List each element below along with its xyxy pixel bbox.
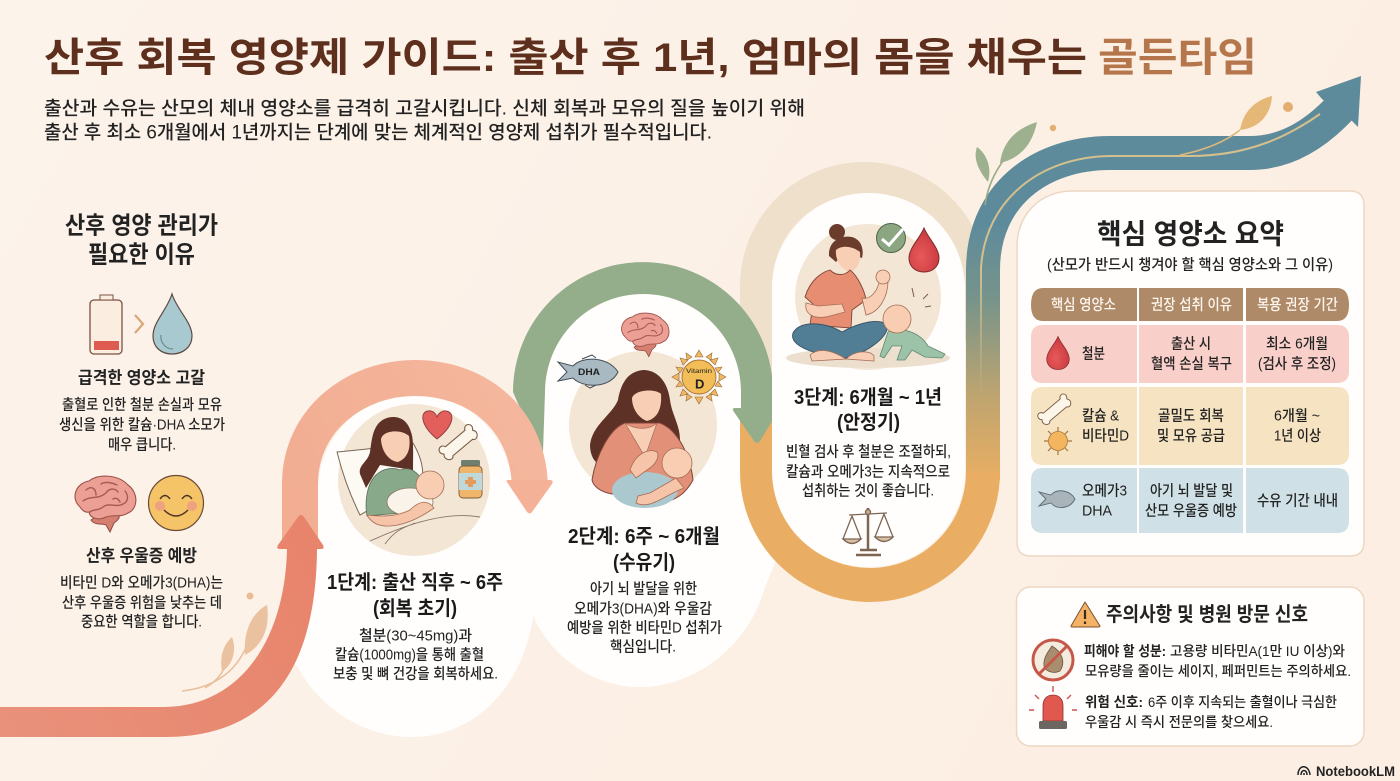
text block: stage 1 xyxy=(333,628,498,682)
text block: stage 3: 섭취하는 것이 좋습니다. xyxy=(802,482,934,500)
icon: smile xyxy=(148,476,204,530)
text block: stage 2: 예방을 위한 비타민D 섭취가 xyxy=(567,620,722,636)
heading: stage 1 xyxy=(327,571,503,620)
text block: danger signs: 우울감 시 즉시 전문의를 찾으세요. xyxy=(1085,714,1273,730)
heading: stage 2: 2단계: 6주 ~ 6개월 xyxy=(568,525,720,548)
text block: stage 2: 오메가3(DHA)와 우울감 xyxy=(574,600,712,618)
subtitle xyxy=(44,98,805,144)
arrow: green stage 2 ribbon xyxy=(513,262,773,452)
table header: 핵심 영양소 xyxy=(1051,296,1116,314)
subtitle: 출산과 수유는 산모의 체내 영양소를 급격히 고갈시킵니다. 신체 회복과 모유의 질을 높이기 위해 xyxy=(44,98,805,120)
heading: why xyxy=(65,212,218,268)
text block: nutrient depletion: 매우 큽니다. xyxy=(108,436,176,454)
title: 골든타임 xyxy=(1098,36,1257,80)
icon: green check xyxy=(876,224,906,252)
text block: nutrient depletion: 생신을 위한 칼슘·DHA 소모가 xyxy=(59,416,225,434)
heading: nutrient depletion: 급격한 영양소 고갈 xyxy=(78,368,205,388)
text block: stage 1: 칼슘(1000mg)을 통해 출혈 xyxy=(335,646,484,664)
panel: stage 3 xyxy=(786,224,951,555)
decoration: green leaves xyxy=(976,122,1037,205)
table row: iron: 철분 xyxy=(1082,346,1105,362)
arrow: orange U-shaped ribbon xyxy=(757,415,983,585)
text block: depression prevention xyxy=(60,574,223,630)
heading: stage 2: (수유기) xyxy=(613,551,675,574)
icon: brain xyxy=(75,476,136,532)
icon: water drop xyxy=(153,294,192,354)
text block: depression prevention: 중요한 역할을 합니다. xyxy=(81,614,202,630)
table header: 복용 권장 기간 xyxy=(1257,296,1338,314)
text block: nutrient depletion: 출혈로 인한 철분 손실과 모유 xyxy=(62,396,222,414)
illustration: mother resting with newborn xyxy=(337,404,490,556)
heading: stage 1: 1단계: 출산 직후 ~ 6주 xyxy=(327,571,503,594)
text block: nutrient depletion xyxy=(59,396,225,454)
table row: iron: (검사 후 조정) xyxy=(1258,356,1336,372)
icon: low battery xyxy=(90,295,122,354)
subtitle: 출산 후 최소 6개월에서 1년까지는 단계에 맞는 체계적인 영양제 섭취가 필수적입니다. xyxy=(44,122,712,144)
text block: stage 3: 칼슘과 오메가3는 지속적으로 xyxy=(786,464,950,480)
text block: card subtitle: (산모가 반드시 챙겨야 할 핵심 영양소와 그 이유) xyxy=(1047,256,1333,274)
heading: stage 3 xyxy=(794,386,942,434)
text block: danger signs: 6주 이후 지속되는 출혈이나 극심한 xyxy=(1148,694,1337,710)
table row: omega-3 DHA: 아기 뇌 발달 및 xyxy=(1150,482,1233,500)
table row: omega-3 DHA: 수유 기간 내내 xyxy=(1257,492,1338,510)
table row: calcium and vitamin D: 골밀도 회복 xyxy=(1158,408,1224,424)
icon: prohibited herb xyxy=(1033,640,1073,680)
text block: depression prevention: 비타민 D와 오메가3(DHA)는 xyxy=(60,574,223,592)
heading: stage 3: (안정기) xyxy=(837,411,900,434)
text block: danger signs xyxy=(1085,694,1337,730)
panel: cautions and warning signs xyxy=(1016,587,1364,746)
title: 산후 회복 영양제 가이드: 출산 후 1년, 엄마의 몸을 채우는 xyxy=(44,36,1087,80)
table row: omega-3 DHA: 오메가3 xyxy=(1082,482,1127,500)
illustration: mother with crawling baby xyxy=(786,224,950,370)
arrow: peach stage 1 ribbon xyxy=(300,378,553,540)
table row: calcium and vitamin D: 비타민D xyxy=(1082,428,1129,444)
text block: stage 1: 철분(30~45mg)과 xyxy=(359,628,472,644)
text block: depression prevention: 산후 우울증 위험을 낮추는 데 xyxy=(62,594,222,612)
decoration: orange leaf and dots xyxy=(1050,96,1293,155)
arrow: salmon rising ribbon xyxy=(0,515,324,737)
icon: vitamin D sun xyxy=(672,350,726,404)
heading: depression prevention: 산후 우울증 예방 xyxy=(86,546,197,566)
icon: red blood drop xyxy=(909,228,939,272)
arrow: green arrowhead xyxy=(733,408,778,443)
icon: DHA fish: DHA xyxy=(578,367,601,377)
heading: why: 필요한 이유 xyxy=(88,242,195,268)
panel: why nutrition management is needed xyxy=(59,212,225,630)
panel: stage 3 white capsule xyxy=(772,193,965,567)
icon: chevron xyxy=(135,315,143,333)
table header xyxy=(1031,288,1349,321)
panel: key nutrients summary xyxy=(1017,191,1364,556)
table row: calcium and vitamin D: 6개월 ~ xyxy=(1274,408,1320,424)
text block: stage 2: 아기 뇌 발달을 위한 xyxy=(590,580,697,598)
icon: balance scale xyxy=(843,508,893,555)
panel: stage 1 xyxy=(327,404,503,682)
table row: omega-3 DHA: 산모 우울증 예방 xyxy=(1145,502,1237,520)
text block: avoid ingredients: 고용량 비타민A(1만 IU 이상)와 xyxy=(1170,643,1345,659)
flow: tan outer arch of stage 3 xyxy=(756,178,972,440)
table row: omega-3 DHA: DHA xyxy=(1082,502,1112,520)
table row: iron: 출산 시 xyxy=(1171,336,1211,352)
text block: avoid ingredients xyxy=(1084,643,1351,679)
arrow: teal arrowhead xyxy=(1316,76,1361,127)
text block: stage 2 xyxy=(567,580,722,656)
text block: stage 1: 보충 및 뼈 건강을 회복하세요. xyxy=(333,666,498,682)
text block: stage 2: 핵심입니다. xyxy=(610,638,676,656)
illustration: breastfeeding mother xyxy=(569,313,717,508)
panel: stage 2 white capsule xyxy=(530,294,800,687)
icon: vitamin D sun: D xyxy=(695,376,704,392)
heading: stage 3: 3단계: 6개월 ~ 1년 xyxy=(794,386,942,409)
panel: stage 2 xyxy=(558,313,726,656)
arrow: orange to teal rising ribbon xyxy=(983,106,1342,480)
table row: calcium and vitamin D: 칼슘 & xyxy=(1082,408,1119,424)
icon: red alarm light xyxy=(1029,686,1077,729)
table row: iron: 최소 6개월 xyxy=(1266,336,1328,352)
heading: cautions: 주의사항 및 병원 방문 신호 xyxy=(1106,603,1308,626)
table row: iron: 혈액 손실 복구 xyxy=(1151,356,1232,372)
logo: NotebookLM: NotebookLM xyxy=(1316,763,1395,779)
decoration: peach leaves near ribbon xyxy=(182,592,268,691)
icon: vitamin D sun: Vitamin xyxy=(686,369,712,375)
text block: stage 3: 빈혈 검사 후 철분은 조절하되, xyxy=(786,444,951,460)
table row: calcium and vitamin D: 및 모유 공급 xyxy=(1157,428,1225,444)
text block: avoid ingredients: 피해야 할 성분: xyxy=(1084,643,1166,659)
decoration: gold line inside teal ribbon xyxy=(981,114,1320,268)
text block: avoid ingredients: 모유량을 줄이는 세이지, 페퍼민트는 주의하세요. xyxy=(1085,663,1351,679)
table row: calcium and vitamin D: 1년 이상 xyxy=(1274,428,1321,444)
heading: stage 2 xyxy=(568,525,720,574)
text block: danger signs: 위험 신호: xyxy=(1085,694,1143,710)
icon: DHA fish xyxy=(558,355,618,388)
table row: calcium and vitamin D xyxy=(1031,387,1349,465)
table header: 권장 섭취 이유 xyxy=(1151,296,1232,314)
table row: omega-3 DHA xyxy=(1031,468,1349,533)
icon: warning triangle xyxy=(1071,602,1100,627)
text block: stage 3 xyxy=(786,444,951,500)
panel: stage 1 white capsule xyxy=(285,394,560,737)
table row: iron xyxy=(1031,325,1349,383)
decoration: gold line lower fade xyxy=(980,266,982,400)
heading: why: 산후 영양 관리가 xyxy=(65,212,218,240)
heading: key nutrients: 핵심 영양소 요약 xyxy=(1097,218,1284,250)
heading: stage 1: (회복 초기) xyxy=(373,597,457,620)
card background xyxy=(1016,587,1364,746)
card background xyxy=(1017,191,1364,556)
